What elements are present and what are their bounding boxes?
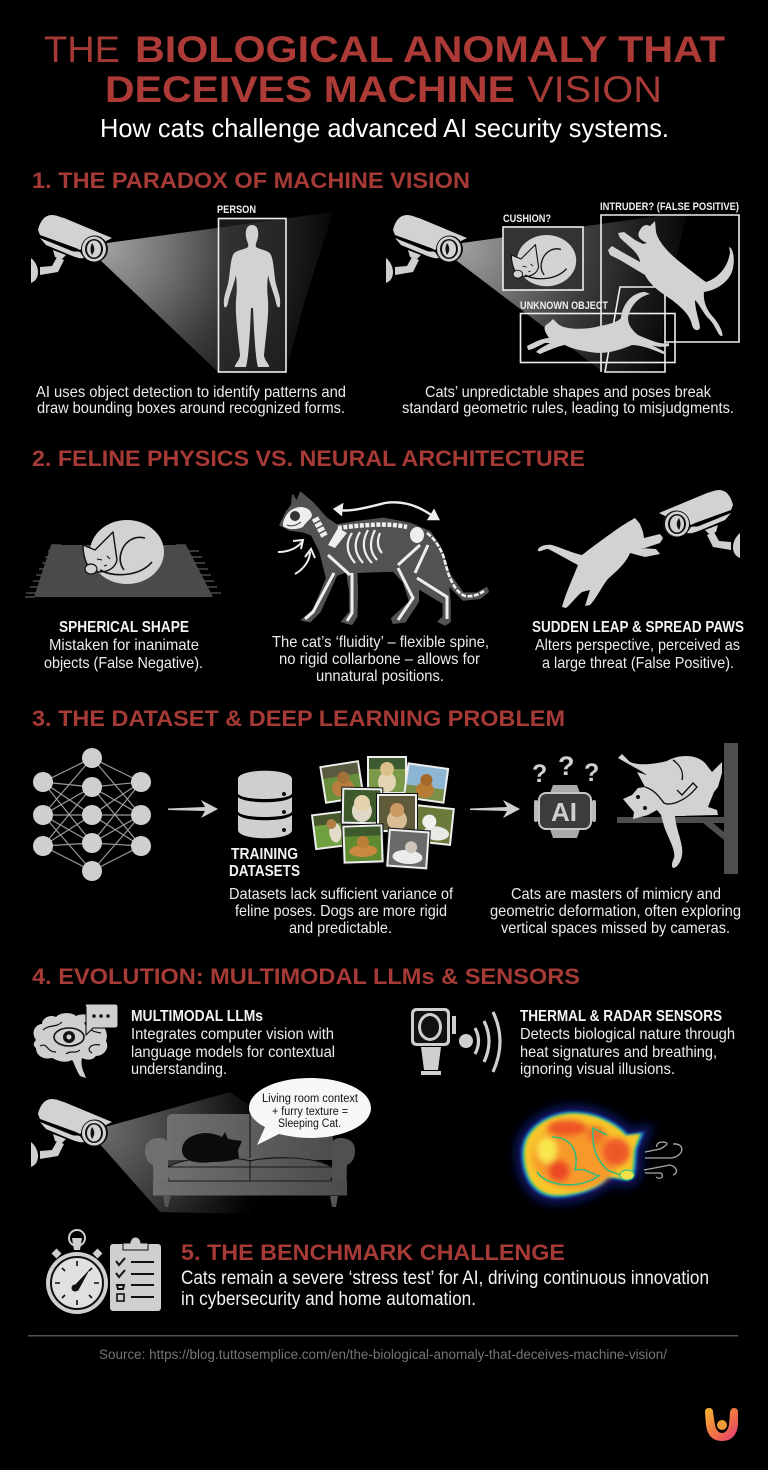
callout: speech bubble: Sleeping Cat. <box>278 1118 341 1130</box>
caption: Cats’ unpredictable shapes and poses break <box>425 384 712 401</box>
text block <box>131 1008 335 1078</box>
subtitle: How cats challenge advanced AI security systems. <box>100 113 669 143</box>
text block: in cybersecurity and home automation. <box>181 1289 476 1310</box>
caption: no rigid collarbone – allows for <box>279 651 481 668</box>
label: person: PERSON <box>217 204 256 216</box>
title <box>44 29 725 110</box>
logo <box>705 1408 738 1441</box>
title: BIOLOGICAL ANOMALY THAT <box>135 29 725 70</box>
icon: security camera <box>31 215 112 283</box>
light cone <box>98 1092 300 1214</box>
section 3 heading: 3. THE DATASET & DEEP LEARNING PROBLEM <box>32 706 565 731</box>
text block: understanding. <box>131 1061 227 1078</box>
labels <box>503 201 739 312</box>
title: THE <box>44 29 120 70</box>
icon: leaping cat <box>538 518 663 608</box>
heading: 5. THE BENCHMARK CHALLENGE <box>181 1240 565 1265</box>
caption: datasets: feline poses. Dogs are more rigid <box>235 903 447 920</box>
caption: datasets: and predictable. <box>289 920 392 937</box>
panel: benchmark challenge <box>46 1230 709 1314</box>
icon: sofa with cat <box>145 1114 355 1207</box>
bounding box: intruder <box>601 215 739 372</box>
icon: brain with eye and chat bubble <box>34 1004 118 1078</box>
text block <box>532 619 744 672</box>
icon: confused AI chip: ? <box>558 751 574 781</box>
text block: heat signatures and breathing, <box>520 1044 717 1061</box>
caption <box>402 384 734 417</box>
label: training datasets: TRAINING <box>231 846 298 863</box>
caption: AI uses object detection to identify patterns and <box>36 384 346 401</box>
icon: stopwatch <box>46 1230 108 1314</box>
icon: security camera <box>386 215 467 283</box>
caption: mimicry: vertical spaces missed by cameras. <box>501 920 730 937</box>
photo collage <box>311 756 455 870</box>
callout: speech bubble <box>249 1078 371 1145</box>
caption <box>36 384 346 417</box>
icon: thermal camera <box>411 1008 456 1075</box>
label: training datasets <box>229 846 300 880</box>
text block: Integrates computer vision with <box>131 1026 334 1043</box>
bounding box: cushion <box>503 227 583 290</box>
panel: person detection <box>31 204 346 417</box>
text block: Cats remain a severe ‘stress test’ for AI, driving continuous innovation <box>181 1268 709 1289</box>
title: VISION <box>527 69 662 110</box>
panel: multimodal LLMs <box>31 1004 371 1214</box>
text block: Mistaken for inanimate <box>49 637 199 654</box>
light cone <box>453 212 688 372</box>
text block: THERMAL & RADAR SENSORS <box>520 1008 722 1025</box>
icon: security camera <box>31 1099 112 1167</box>
icon: curled cat <box>83 520 164 584</box>
section 1 heading: 1. THE PARADOX OF MACHINE VISION <box>32 168 470 193</box>
icon: confused AI chip <box>532 751 599 838</box>
callout: speech bubble: + furry texture = <box>272 1106 348 1118</box>
text block: ignoring visual illusions. <box>520 1061 675 1078</box>
icon: security camera <box>659 490 740 558</box>
icon: radar waves <box>459 1012 500 1072</box>
icon: confused AI chip: AI <box>551 797 577 827</box>
panel: cat misdetections <box>386 201 739 417</box>
caption: standard geometric rules, leading to misjudgments. <box>402 400 734 417</box>
icon: confused AI chip: ? <box>532 760 547 788</box>
arrow <box>168 800 218 818</box>
caption <box>272 634 489 685</box>
text block: Detects biological nature through <box>520 1026 735 1043</box>
text block <box>181 1268 709 1310</box>
panel: sudden leap <box>532 490 744 672</box>
caption: datasets <box>229 886 454 937</box>
callout: speech bubble: Living room context <box>262 1093 359 1105</box>
icon: checklist clipboard <box>110 1237 161 1311</box>
labels: UNKNOWN OBJECT <box>520 300 608 312</box>
arrow <box>470 800 520 818</box>
icon: cat on wall shelf <box>617 743 738 874</box>
panel: thermal and radar <box>411 1008 735 1197</box>
panel: spherical shape <box>25 520 221 672</box>
panel: feline fluidity <box>272 492 489 685</box>
icon: confused AI chip: ? <box>584 759 599 787</box>
icon: person silhouette <box>224 225 280 367</box>
text block: MULTIMODAL LLMs <box>131 1008 263 1025</box>
caption: mimicry: Cats are masters of mimicry and <box>511 886 721 903</box>
text block: a large threat (False Positive). <box>542 655 734 672</box>
label: training datasets: DATASETS <box>229 863 300 880</box>
icon: running cat <box>527 292 669 354</box>
bounding box: unknown object <box>520 314 675 362</box>
icon: neural network <box>33 748 151 881</box>
icon: curled cat <box>511 235 576 286</box>
text block: Alters perspective, perceived as <box>535 637 740 654</box>
section 4 heading: 4. EVOLUTION: MULTIMODAL LLMs & SENSORS <box>32 964 580 989</box>
labels: CUSHION? <box>503 213 551 225</box>
icon: thermal heat map of cat <box>522 1112 643 1197</box>
text block <box>520 1008 735 1078</box>
caption: unnatural positions. <box>316 668 444 685</box>
caption: draw bounding boxes around recognized forms. <box>37 400 345 417</box>
light cone <box>98 212 333 372</box>
icon: cat skeleton <box>280 492 488 625</box>
icon: rug <box>25 545 221 597</box>
source line: Source: https://blog.tuttosemplice.com/en/the-biological-anomaly-that-deceives-machine-vision/ <box>99 1347 667 1362</box>
text block: language models for contextual <box>131 1044 335 1061</box>
text block: objects (False Negative). <box>44 655 203 672</box>
text block: SPHERICAL SHAPE <box>59 619 189 636</box>
caption: The cat’s ‘fluidity’ – flexible spine, <box>272 634 489 651</box>
section 2 heading: 2. FELINE PHYSICS VS. NEURAL ARCHITECTURE <box>32 446 585 471</box>
labels: INTRUDER? (FALSE POSITIVE) <box>600 201 739 213</box>
arrows: spine flex and collarbone <box>278 502 438 574</box>
icon: leaping cat <box>608 221 734 336</box>
title: DECEIVES MACHINE <box>105 69 515 110</box>
icon: breath lines <box>644 1142 682 1178</box>
bounding box: person <box>218 218 286 372</box>
caption: mimicry <box>490 886 741 937</box>
caption: mimicry: geometric deformation, often exploring <box>490 903 741 920</box>
icon: database <box>238 771 292 838</box>
caption: datasets: Datasets lack sufficient variance of <box>229 886 454 903</box>
text block <box>44 619 203 672</box>
